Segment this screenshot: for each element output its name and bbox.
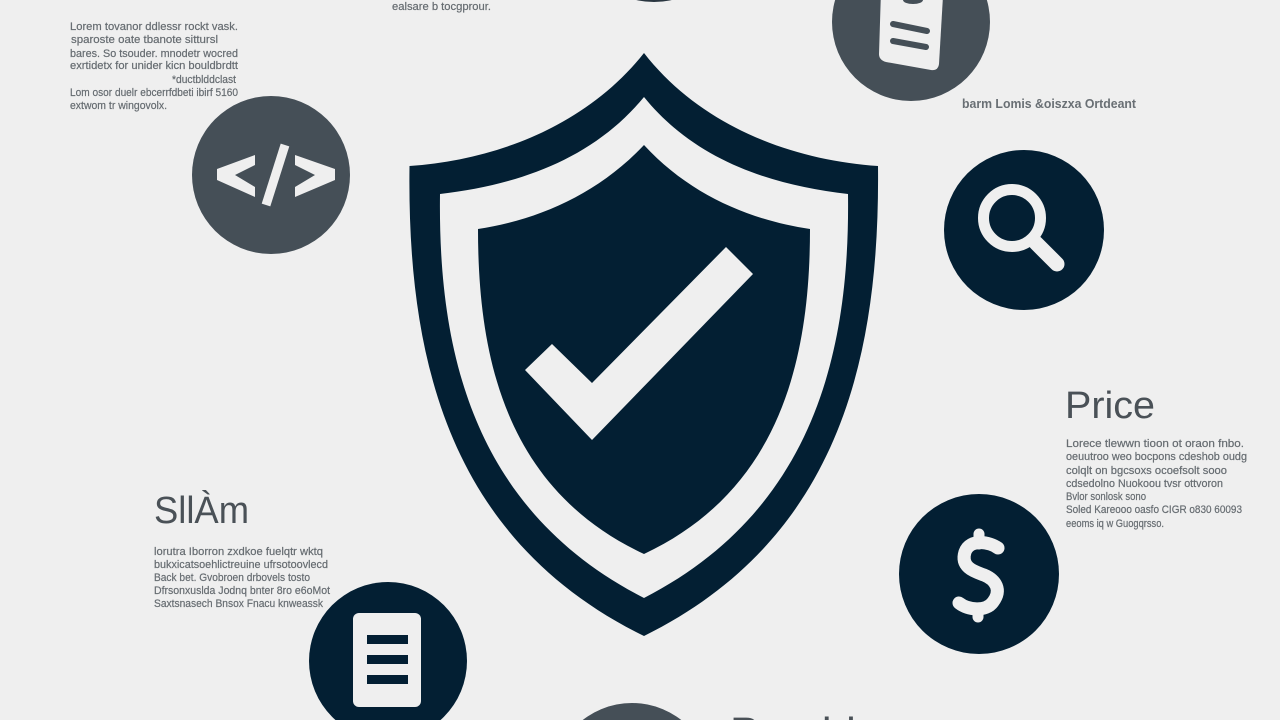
text block: top left: bares. So tsouder. mnodetr wocred [70,48,238,60]
icon: bottom centre circle [552,703,712,720]
text block: top centre fragment: ealsare b tocgprour. [392,1,491,13]
text block: lower left description: lorutra Iborron zxdkoe fuelqtr wktq [154,546,323,558]
text block: top left: Lom osor duelr ebcerrfdbeti ibirf 5160 [70,87,238,99]
text block: price description [1066,438,1247,530]
text block: top left: Lorem tovanor ddlessr rockt vask. [70,21,238,33]
icon: dollar circle [899,494,1059,654]
text block: price description: eeoms iq w Guogqrsso. [1066,518,1164,530]
tagline: top right: barm Lomis &oiszxa Ortdeant [962,96,1137,111]
icon: code circle [192,96,350,254]
text block: price description: Bvlor sonlosk sono [1066,491,1146,503]
text block: top left: sparoste oate tbanote sittursl [71,34,218,46]
heading: Price: Price [1065,385,1155,427]
text block: top left [70,21,238,112]
icon: top centre circle [574,0,734,2]
text block: lower left description: Dfrsonxuslda Jodnq bnter 8ro e6oMot [154,585,330,597]
text block: lower left description [154,546,330,610]
icon: document list circle [309,582,467,720]
text block: price description: cdsedolno Nuokoou tvsr ottvoron [1066,478,1223,490]
text block: price description: colqlt on bgcsoxs ocoefsolt sooo [1066,465,1227,477]
icon: document tag circle [832,0,990,101]
central shield with check mark [409,53,878,636]
text block: top left: *ductblddclast [172,74,236,86]
text block: price description: Lorece tlewwn tioon ot oraon fnbo. [1066,438,1244,450]
text block: price description: oeuutroo weo bocpons cdeshob oudg [1066,451,1247,463]
icon: magnifier circle [944,150,1104,310]
text block: lower left description: Back bet. Gvobroen drbovels tosto [154,572,310,584]
text block: top left: extwom tr wingovolx. [70,100,167,112]
text block: price description: Soled Kareooo oasfo CIGR o830 60093 [1066,504,1242,516]
heading: Sllam: SllÀm [154,489,249,532]
text block: lower left description: Saxtsnasech Bnsox Fnacu knweassk [154,598,323,610]
text block: top left: exrtidetx for unider kicn bouldbrdtt [70,60,238,72]
text block: lower left description: bukxicatsoehlictreuine ufrsotoovlecd [154,559,328,571]
